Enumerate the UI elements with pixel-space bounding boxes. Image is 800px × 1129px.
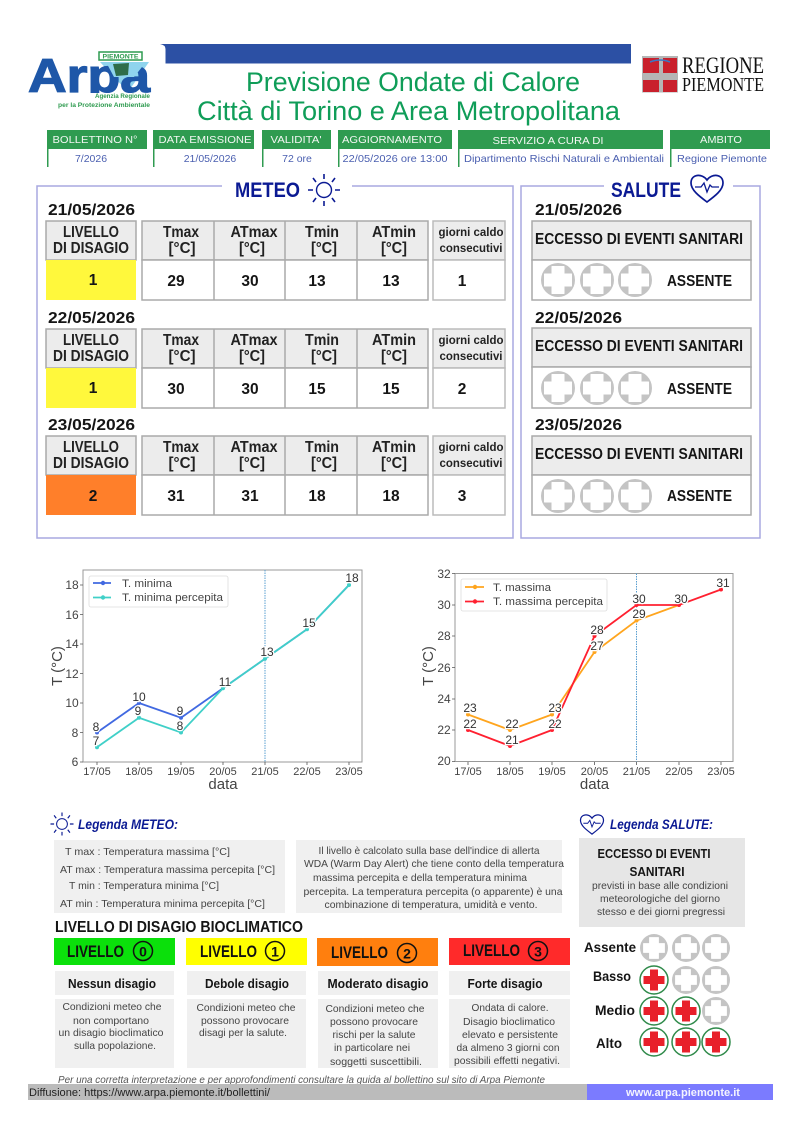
meteo day 3: 31 <box>241 488 259 505</box>
chart legend: T. massima <box>493 582 552 594</box>
meteo day 1 <box>46 202 505 300</box>
line chart: temperature massime: 23 <box>548 701 562 715</box>
line chart: temperature minime: 17/05 <box>83 766 111 778</box>
meteo day 1: [°C] <box>381 240 407 257</box>
meteo day 1: ATmin <box>372 224 416 241</box>
meteo day 3: [°C] <box>239 455 265 472</box>
header info strip <box>47 130 770 167</box>
line chart: temperature minime: 14 <box>65 637 79 651</box>
legend box: WDA explanation: percepita. La temperatura percepita (o apparente) è una <box>304 886 563 898</box>
meteo day 3: Tmax <box>163 439 199 456</box>
heading: legenda meteo <box>50 812 178 836</box>
line chart: temperature massime: 30 <box>674 592 688 606</box>
salute day 2 <box>532 310 751 408</box>
line chart: temperature massime: 21/05 <box>623 766 650 778</box>
meteo day 3: [°C] <box>311 455 337 472</box>
level card 1: 1 <box>271 944 279 960</box>
line chart: temperature minime: 6 <box>72 755 79 769</box>
legend box: eccesso eventi sanitari: ECCESSO DI EVENTI <box>598 846 710 861</box>
line chart: temperature massime: 18/05 <box>496 766 524 778</box>
meteo heading <box>235 174 340 206</box>
meteo day 3: giorni caldo <box>438 440 504 454</box>
logo: Regione Piemonte: PIEMONTE <box>682 74 764 96</box>
line chart: temperature massime: 22 <box>548 717 562 731</box>
level card 3: Forte disagio <box>468 976 543 991</box>
meteo day 3: 18 <box>308 488 326 505</box>
chart legend: T. minima <box>122 578 173 590</box>
line chart: temperature minime: 20/05 <box>209 766 237 778</box>
meteo day 3: ATmax <box>230 439 278 456</box>
legend box: WDA explanation: WDA (Warm Day Alert) che tiene conto della temperatura <box>304 858 564 870</box>
level card 1: disagi per la salute. <box>199 1027 287 1039</box>
legend box: temperature symbols <box>54 840 285 913</box>
legend box: WDA explanation: combinazione di temperatura, umidità e vento. <box>324 899 538 911</box>
level card 2: 2 <box>403 946 411 962</box>
meteo day 3: 2 <box>89 488 97 505</box>
line chart: temperature massime: 30 <box>437 598 451 612</box>
legend: health risk levels: Medio <box>595 1002 635 1018</box>
level card 2: LIVELLO <box>331 943 388 962</box>
level card 1 <box>186 938 307 1068</box>
line chart: temperature minime: 16 <box>65 608 79 622</box>
meteo day 2: [°C] <box>239 348 265 365</box>
header info strip: Regione Piemonte <box>677 153 767 165</box>
level card 2: Condizioni meteo che <box>326 1003 425 1015</box>
legend: health risk levels <box>584 934 730 1056</box>
line chart: temperature minime: 18 <box>65 578 79 592</box>
salute day 3: ASSENTE <box>667 488 732 505</box>
panel: meteo <box>37 174 513 538</box>
meteo day 1: [°C] <box>168 240 196 257</box>
line chart: temperature massime: 27 <box>590 639 604 653</box>
meteo day 1: [°C] <box>239 240 265 257</box>
meteo day 2: Tmin <box>305 332 339 349</box>
line chart: temperature minime: 7 <box>93 734 100 748</box>
line chart: temperature massime: 22 <box>463 717 477 731</box>
level card 2: rischi per la salute <box>332 1029 416 1041</box>
logo: Regione Piemonte <box>642 53 764 96</box>
line chart: temperature massime: 28 <box>590 623 604 637</box>
meteo day 2: giorni caldo <box>438 333 504 347</box>
header info strip: AMBITO <box>700 134 742 146</box>
legend box: eccesso eventi sanitari: previsti in base alle condizioni <box>592 880 728 892</box>
line chart: temperature minime: 10 <box>132 690 146 704</box>
title: Previsione Ondate di Calore <box>246 67 580 97</box>
meteo day 2: 15 <box>308 381 326 398</box>
level card 3 <box>449 938 570 1068</box>
meteo day 1: 21/05/2026 <box>48 202 135 219</box>
level card 0: Nessun disagio <box>68 976 156 991</box>
meteo day 3: ATmin <box>372 439 416 456</box>
line chart: temperature massime: 24 <box>437 692 451 706</box>
meteo day 1: ATmax <box>230 224 278 241</box>
level card 2 <box>317 938 438 1068</box>
header info strip: AGGIORNAMENTO <box>342 134 442 146</box>
level card 3: Disagio bioclimatico <box>463 1016 555 1028</box>
salute day 3: 23/05/2026 <box>535 417 622 434</box>
legend: health risk levels: Assente <box>584 939 636 955</box>
level card 1: Debole disagio <box>205 976 289 991</box>
meteo day 1: LIVELLO <box>63 224 119 241</box>
meteo day 2: Tmax <box>163 332 199 349</box>
salute day 1: 21/05/2026 <box>535 202 622 219</box>
footer bar: www.arpa.piemonte.it <box>625 1087 740 1099</box>
meteo day 2 <box>46 310 505 408</box>
header info strip: SERVIZIO A CURA DI <box>492 135 604 147</box>
line chart: temperature minime: data <box>208 776 238 793</box>
meteo day 1: Tmax <box>163 224 199 241</box>
line chart: temperature massime: 31 <box>716 576 730 590</box>
meteo day 2: 15 <box>382 381 400 398</box>
header info strip: BOLLETTINO N° <box>52 134 138 146</box>
line chart: temperature massime: 22 <box>437 723 451 737</box>
level card 0: sulla popolazione. <box>74 1040 156 1052</box>
salute day 1 <box>532 202 751 300</box>
meteo day 3: consecutivi <box>440 456 502 470</box>
level card 3: possibili effetti negativi. <box>454 1055 560 1067</box>
meteo day 2: 30 <box>241 381 259 398</box>
line chart: temperature massime: 23 <box>463 701 477 715</box>
chart legend: T. minima percepita <box>122 592 224 604</box>
level card 3: Ondata di calore. <box>472 1002 548 1014</box>
meteo day 1: Tmin <box>305 224 339 241</box>
meteo day 1: 13 <box>382 273 400 290</box>
meteo day 3: [°C] <box>168 455 196 472</box>
level card 0: 0 <box>139 944 147 960</box>
meteo day 1: consecutivi <box>440 241 502 255</box>
meteo day 1: 29 <box>167 273 185 290</box>
meteo day 1: giorni caldo <box>438 225 504 239</box>
line chart: temperature minime: 13 <box>260 645 274 659</box>
meteo day 3: 23/05/2026 <box>48 417 135 434</box>
line chart: temperature minime: 22/05 <box>293 766 321 778</box>
salute day 2: 22/05/2026 <box>535 310 622 327</box>
meteo day 2: DI DISAGIO <box>53 348 129 365</box>
line chart: temperature massime: 29 <box>632 607 646 621</box>
salute day 2: ECCESSO DI EVENTI SANITARI <box>535 338 743 355</box>
meteo day 3: LIVELLO <box>63 439 119 456</box>
header info strip: VALIDITA' <box>270 134 322 146</box>
level card 0: un disagio bioclimatico <box>58 1027 164 1039</box>
meteo day 2: ATmax <box>230 332 278 349</box>
legend box: temperature symbols: AT min : Temperatura minima percepita [°C] <box>60 898 265 910</box>
legend box: eccesso eventi sanitari: stesso e dei giorni pregressi <box>597 906 725 918</box>
legend box: temperature symbols: AT max : Temperatura massima percepita [°C] <box>60 864 275 876</box>
salute heading: SALUTE <box>611 179 681 202</box>
header info strip: DATA EMISSIONE <box>158 134 252 146</box>
level card 3: 3 <box>534 944 542 960</box>
line chart: temperature massime: 21 <box>505 733 519 747</box>
meteo day 3: 18 <box>382 488 400 505</box>
logo: Arpa Piemonte: per la Protezione Ambientale <box>58 103 151 109</box>
guide note: Per una corretta interpretazione e per approfondimenti consultare la guida al bollettino sul sito di Arpa Piemonte <box>58 1074 545 1086</box>
line chart: temperature minime: 10 <box>65 696 79 710</box>
line chart: temperature minime: 12 <box>65 667 79 681</box>
line chart: temperature massime: 19/05 <box>538 766 566 778</box>
salute heading <box>611 175 723 202</box>
meteo day 2: 30 <box>167 381 185 398</box>
salute day 3: ECCESSO DI EVENTI SANITARI <box>535 446 743 463</box>
line chart: temperature minime: 18 <box>345 571 359 585</box>
salute day 1: ECCESSO DI EVENTI SANITARI <box>535 231 743 248</box>
legend box: eccesso eventi sanitari <box>579 838 745 927</box>
line chart: temperature minime: 8 <box>72 726 79 740</box>
legend box: WDA explanation: massima percepita e della temperatura minima <box>313 872 527 884</box>
line chart: temperature massime <box>420 567 735 793</box>
meteo day 3: [°C] <box>381 455 407 472</box>
legend box: temperature symbols: T min : Temperatura minima [°C] <box>69 880 219 892</box>
meteo day 1: DI DISAGIO <box>53 240 129 257</box>
header info strip: 7/2026 <box>75 153 107 165</box>
logo: Arpa Piemonte: Arpa <box>28 49 151 102</box>
meteo heading: METEO <box>235 179 300 202</box>
header info strip: 22/05/2026 ore 13:00 <box>342 153 448 165</box>
meteo day 2: ATmin <box>372 332 416 349</box>
level card 1: Condizioni meteo che <box>196 1002 296 1014</box>
meteo day 3: Tmin <box>305 439 339 456</box>
line chart: temperature minime: 23/05 <box>335 766 363 778</box>
line chart: temperature minime: 11 <box>219 675 232 689</box>
line chart: temperature massime: 28 <box>437 629 451 643</box>
line chart: temperature minime: 21/05 <box>251 766 279 778</box>
logo: Arpa Piemonte: PIEMONTE <box>102 54 139 60</box>
header info strip: 72 ore <box>282 153 312 165</box>
meteo day 2: 1 <box>89 380 98 397</box>
line chart: temperature massime: 30 <box>632 592 646 606</box>
meteo day 2: [°C] <box>168 348 196 365</box>
header info strip: 21/05/2026 <box>184 153 236 165</box>
meteo day 3: 31 <box>167 488 185 505</box>
line chart: temperature minime: 8 <box>93 720 100 734</box>
line chart: temperature massime: 22 <box>505 717 519 731</box>
heading: legenda meteo: Legenda METEO: <box>78 816 178 832</box>
line chart: temperature minime: 19/05 <box>167 766 195 778</box>
line chart: temperature massime: 20 <box>437 754 451 768</box>
line chart: temperature massime: 26 <box>437 661 451 675</box>
meteo day 1: 1 <box>89 272 98 289</box>
line chart: temperature massime: 23/05 <box>707 766 735 778</box>
level card 2: possono provocare <box>330 1016 418 1028</box>
line chart: temperature massime: 17/05 <box>454 766 482 778</box>
meteo day 3: 3 <box>458 488 467 505</box>
line chart: temperature massime: 20/05 <box>581 766 608 778</box>
footer bar <box>28 1084 773 1100</box>
level card 2: Moderato disagio <box>328 976 429 991</box>
level card 3: elevato e persistente <box>462 1029 558 1041</box>
legend box: temperature symbols: T max : Temperatura massima [°C] <box>65 846 230 858</box>
line chart: temperature minime: 15 <box>302 616 316 630</box>
level card 3: da almeno 3 giorni con <box>456 1042 560 1054</box>
line chart: temperature massime: 22/05 <box>665 766 693 778</box>
line chart: temperature massime: 32 <box>437 567 451 581</box>
chart legend <box>89 576 228 607</box>
meteo day 1: 30 <box>241 273 259 290</box>
heading: livello di disagio bioclimatico: LIVELLO DI DISAGIO BIOCLIMATICO <box>55 919 303 936</box>
line chart: temperature minime <box>49 570 363 793</box>
legend box: WDA explanation <box>296 840 564 913</box>
salute day 1: ASSENTE <box>667 273 732 290</box>
level card 0: non comportano <box>73 1015 149 1027</box>
meteo day 1: 1 <box>458 273 467 290</box>
level card 1: possono provocare <box>201 1015 289 1027</box>
line chart: temperature massime: T (°C) <box>420 646 437 686</box>
meteo day 3 <box>46 417 505 515</box>
line chart: temperature minime: 9 <box>177 704 184 718</box>
chart legend: T. massima percepita <box>493 596 604 608</box>
salute day 3 <box>532 417 751 515</box>
chart legend <box>461 579 607 611</box>
meteo day 2: [°C] <box>381 348 407 365</box>
level card 1: LIVELLO <box>200 942 257 961</box>
meteo day 3: DI DISAGIO <box>53 455 129 472</box>
line chart: temperature minime: 18/05 <box>125 766 153 778</box>
line chart: temperature minime: T (°C) <box>49 646 66 686</box>
heading: legenda salute <box>580 815 713 834</box>
legend box: eccesso eventi sanitari: SANITARI <box>630 864 684 879</box>
meteo day 2: consecutivi <box>440 349 502 363</box>
panel: salute <box>521 175 760 538</box>
heading: legenda salute: Legenda SALUTE: <box>610 816 713 832</box>
header info strip: Dipartimento Rischi Naturali e Ambientali <box>464 153 664 165</box>
level card 2: in particolare nei <box>334 1042 410 1054</box>
legend: health risk levels: Alto <box>596 1035 622 1051</box>
line chart: temperature minime: 8 <box>177 719 184 733</box>
meteo day 2: LIVELLO <box>63 332 119 349</box>
level card 0: LIVELLO <box>67 942 124 961</box>
level card 0 <box>54 938 175 1068</box>
line chart: temperature massime: data <box>580 776 610 793</box>
meteo day 2: 2 <box>458 381 466 398</box>
level card 3: LIVELLO <box>463 941 520 960</box>
title <box>197 67 621 126</box>
legend box: WDA explanation: Il livello è calcolato sulla base dell'indice di allerta <box>318 845 540 857</box>
legend box: eccesso eventi sanitari: meteorologiche del giorno <box>600 893 720 905</box>
title: Città di Torino e Area Metropolitana <box>197 96 621 126</box>
meteo day 2: 22/05/2026 <box>48 310 135 327</box>
meteo day 2: [°C] <box>311 348 337 365</box>
top blue bar <box>160 44 631 64</box>
logo: Arpa Piemonte: Agenzia Regionale <box>95 94 151 100</box>
level card 2: soggetti suscettibili. <box>330 1056 422 1068</box>
footer bar: Diffusione: https://www.arpa.piemonte.it/bollettini/ <box>29 1087 271 1099</box>
logo: Regione Piemonte: REGIONE <box>682 53 764 78</box>
legend: health risk levels: Basso <box>593 968 631 984</box>
line chart: temperature minime: 9 <box>135 704 142 718</box>
meteo day 1: [°C] <box>311 240 337 257</box>
level card 0: Condizioni meteo che <box>62 1001 162 1013</box>
meteo day 1: 13 <box>308 273 326 290</box>
salute day 2: ASSENTE <box>667 381 732 398</box>
